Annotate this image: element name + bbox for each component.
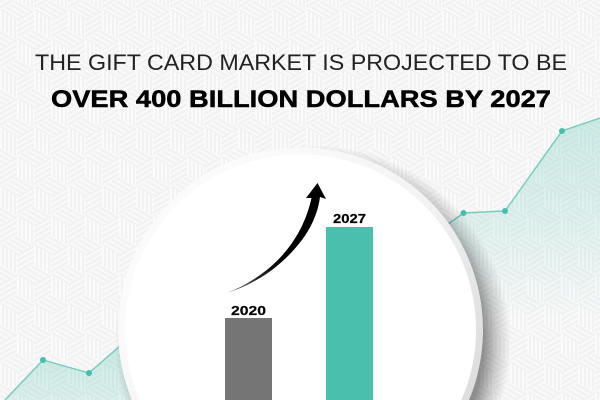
- label: 2020: 2020: [231, 303, 266, 318]
- arrow: growth: [227, 183, 326, 293]
- left line chart: [5, 337, 130, 400]
- title line 2: OVER 400 BILLION DOLLARS BY 2027: [51, 86, 551, 113]
- circle shadow: [100, 130, 530, 400]
- title line 1: THE GIFT CARD MARKET IS PROJECTED TO BE: [35, 50, 567, 75]
- bar: 2027: [326, 227, 373, 400]
- right line chart: [440, 118, 600, 330]
- label: 2027: 2027: [333, 211, 366, 226]
- bar: 2020: [225, 318, 272, 400]
- circle panel: [118, 147, 483, 400]
